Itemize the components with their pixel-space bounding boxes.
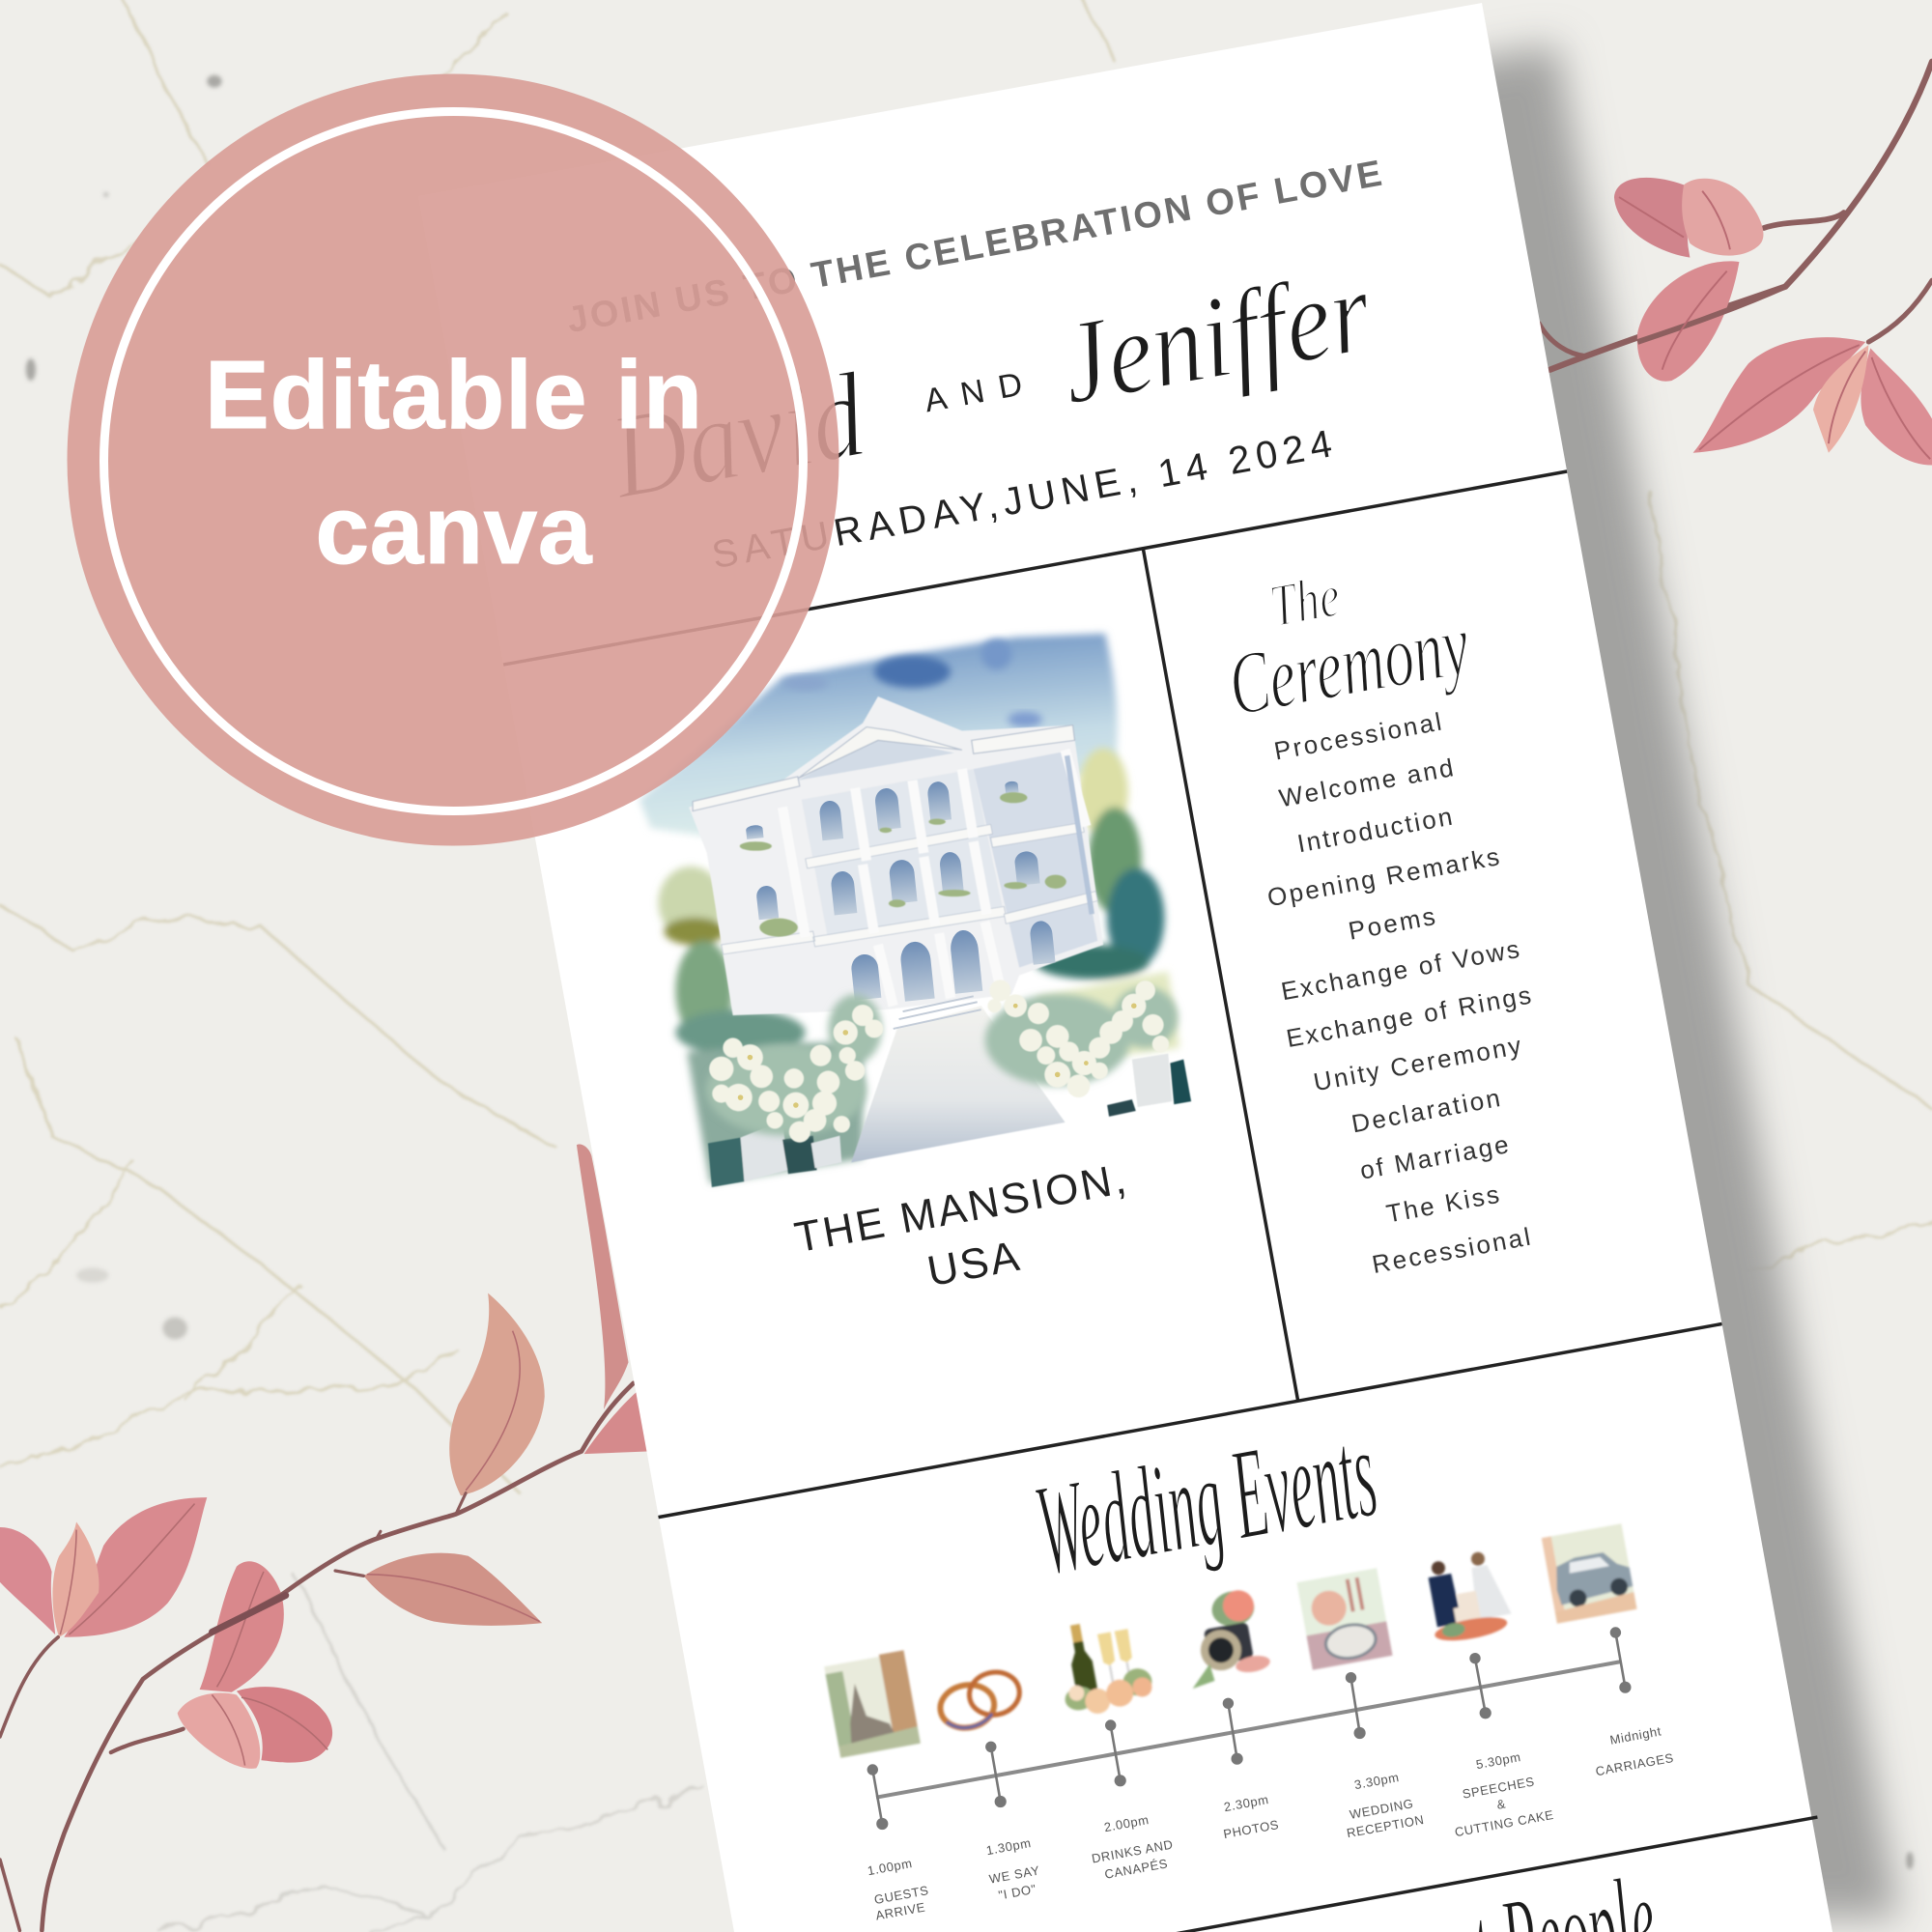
timeline labels: RECEPTION — [1346, 1812, 1426, 1840]
icon: couple cutting cake — [1422, 1548, 1515, 1645]
timeline labels: GUESTS — [873, 1883, 930, 1907]
timeline labels: 1.30pm — [985, 1835, 1033, 1858]
ceremony order list: Welcome and — [1277, 753, 1458, 812]
badge disc — [68, 73, 838, 846]
stems — [0, 1383, 634, 1930]
ceremony order list: Recessional — [1370, 1221, 1535, 1279]
venue name: USA — [923, 1233, 1023, 1295]
ceremony order list: Opening Remarks — [1265, 841, 1504, 912]
sky — [639, 634, 1118, 845]
badge text — [205, 341, 702, 584]
timeline labels: CARRIAGES — [1595, 1750, 1675, 1778]
upper leaves — [1614, 178, 1785, 382]
timeline labels: 1.00pm — [867, 1856, 914, 1878]
name: David: David — [600, 348, 874, 525]
icon: camera — [1177, 1587, 1272, 1689]
ceremony order list: Declaration — [1350, 1083, 1504, 1138]
ceremony heading: Ceremony — [1221, 594, 1476, 734]
timeline labels: SPEECHES — [1462, 1774, 1536, 1802]
timeline — [867, 1629, 1675, 1923]
eucalyptus branch: upper right — [1539, 62, 1932, 466]
section dividers — [503, 470, 1817, 1932]
timeline labels: WEDDING — [1349, 1796, 1415, 1822]
eucalyptus branch: lower left — [0, 1145, 650, 1930]
date: SATURADAY,JUNE, 14 2024 — [709, 423, 1335, 577]
icon: wedding rings — [935, 1668, 1024, 1732]
timeline labels: 2.30pm — [1223, 1792, 1270, 1814]
badge text: Editable in — [205, 341, 702, 449]
paper: wedding program — [418, 3, 1842, 1932]
icon: reception table — [1296, 1568, 1393, 1670]
badge text: canva — [315, 476, 593, 584]
badge ring — [104, 112, 804, 811]
ceremony order list: Unity Ceremony — [1311, 1030, 1525, 1096]
mansion facade — [689, 696, 1103, 1015]
timeline labels: 2.00pm — [1103, 1812, 1151, 1834]
white flower bushes — [706, 980, 1178, 1143]
ceremony order list: Introduction — [1295, 801, 1457, 858]
ceremony order list: Poems — [1346, 901, 1439, 946]
balcony greenery — [740, 792, 1066, 937]
ceremony order list: of Marriage — [1357, 1129, 1513, 1185]
timeline labels: Midnight — [1608, 1723, 1662, 1747]
ceremony order list: Exchange of Rings — [1284, 980, 1535, 1053]
icon: church — [824, 1650, 921, 1758]
ceremony order list: Exchange of Vows — [1279, 934, 1523, 1006]
ceremony order list: Processional — [1272, 706, 1446, 766]
front walk and steps — [851, 996, 1065, 1162]
watercolor illustration: the mansion — [639, 634, 1191, 1187]
invitation line: JOIN US TO THE CELEBRATION OF LOVE — [564, 154, 1385, 341]
timeline axis — [876, 1662, 1621, 1798]
ceremony heading — [1211, 542, 1476, 734]
icon: champagne — [1052, 1613, 1156, 1719]
timeline labels: DRINKS AND — [1091, 1837, 1175, 1866]
timeline labels — [867, 1723, 1675, 1923]
gardens and trees — [659, 748, 1179, 1183]
venue name — [791, 1155, 1140, 1318]
badge: editable in canva — [68, 73, 838, 846]
urns and plinths — [708, 1054, 1191, 1187]
timeline labels: CANAPÉS — [1103, 1856, 1169, 1882]
paper content — [441, 129, 1842, 1932]
paper drop shadow — [464, 44, 1899, 1918]
venue name: THE MANSION, — [791, 1155, 1129, 1262]
ceremony order list: The Kiss — [1384, 1179, 1503, 1229]
ceremony heading: The — [1264, 563, 1345, 640]
mansion windows — [746, 781, 1056, 1002]
ceremony order list — [1234, 699, 1577, 1287]
timeline markers — [868, 1629, 1630, 1829]
icon: vintage car — [1542, 1523, 1637, 1624]
lower leaves — [1693, 337, 1932, 466]
timeline labels: PHOTOS — [1222, 1817, 1280, 1841]
name: Jeniffer: Jeniffer — [1051, 245, 1380, 429]
timeline labels: "I DO" — [997, 1882, 1037, 1902]
word: AND: AND — [922, 366, 1025, 419]
stems — [1539, 62, 1932, 370]
paper sheet — [418, 3, 1833, 1932]
timeline labels: CUTTING CAKE — [1454, 1807, 1555, 1839]
timeline labels: ARRIVE — [874, 1900, 926, 1923]
timeline labels: & — [1495, 1796, 1507, 1812]
timeline labels: 3.30pm — [1353, 1770, 1401, 1792]
timeline labels: WE SAY — [988, 1862, 1041, 1887]
timeline labels: 5.30pm — [1475, 1749, 1522, 1772]
paper content: Wedding Events — [1026, 1401, 1386, 1603]
leaves — [0, 1145, 650, 1769]
